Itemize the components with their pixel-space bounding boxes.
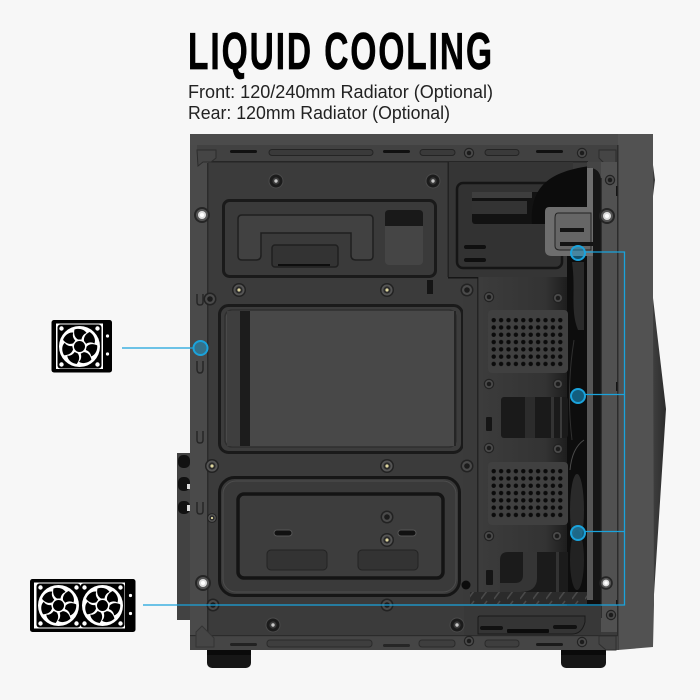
cable clips on left flange — [197, 294, 203, 514]
bottom shroud — [462, 580, 601, 635]
front panel — [618, 134, 654, 650]
chassis screws — [194, 174, 616, 632]
callout marker: front radiator bottom — [571, 526, 585, 540]
left flange — [190, 145, 208, 636]
right chassis column — [448, 276, 568, 635]
top-left recessed frame — [224, 200, 436, 276]
upper vent — [488, 310, 568, 373]
front panel wedge — [653, 165, 666, 610]
callout marker: front radiator middle — [571, 389, 585, 403]
lower opening — [500, 552, 568, 592]
subtitle text: Rear: 120mm Radiator (Optional) — [188, 103, 450, 123]
icon: 120mm radiator — [52, 320, 112, 372]
rear expansion bracket — [177, 453, 191, 620]
top flange with slots — [197, 145, 617, 166]
rear-top fan bracket — [545, 168, 593, 256]
callout marker: left — [194, 341, 208, 355]
title: LIQUID COOLING — [188, 23, 494, 81]
subtitle text — [188, 82, 493, 123]
lower vent — [488, 462, 568, 525]
case feet — [207, 646, 606, 668]
top rim — [190, 134, 618, 145]
PC case — [177, 134, 666, 668]
icon: 240mm radiator — [30, 579, 136, 632]
large central panel — [220, 306, 462, 452]
upper recess — [448, 162, 592, 277]
callout marker: rear radiator top — [571, 246, 585, 260]
lower PSU-side panel — [220, 478, 460, 596]
bottom rim — [190, 626, 618, 650]
interior dark channel with cables and fans — [567, 165, 601, 636]
chassis body — [190, 134, 618, 650]
middle opening — [501, 397, 568, 438]
right flange — [587, 145, 618, 650]
callout lines: connectors — [122, 252, 624, 605]
subtitle text: Front: 120/240mm Radiator (Optional) — [188, 82, 493, 102]
